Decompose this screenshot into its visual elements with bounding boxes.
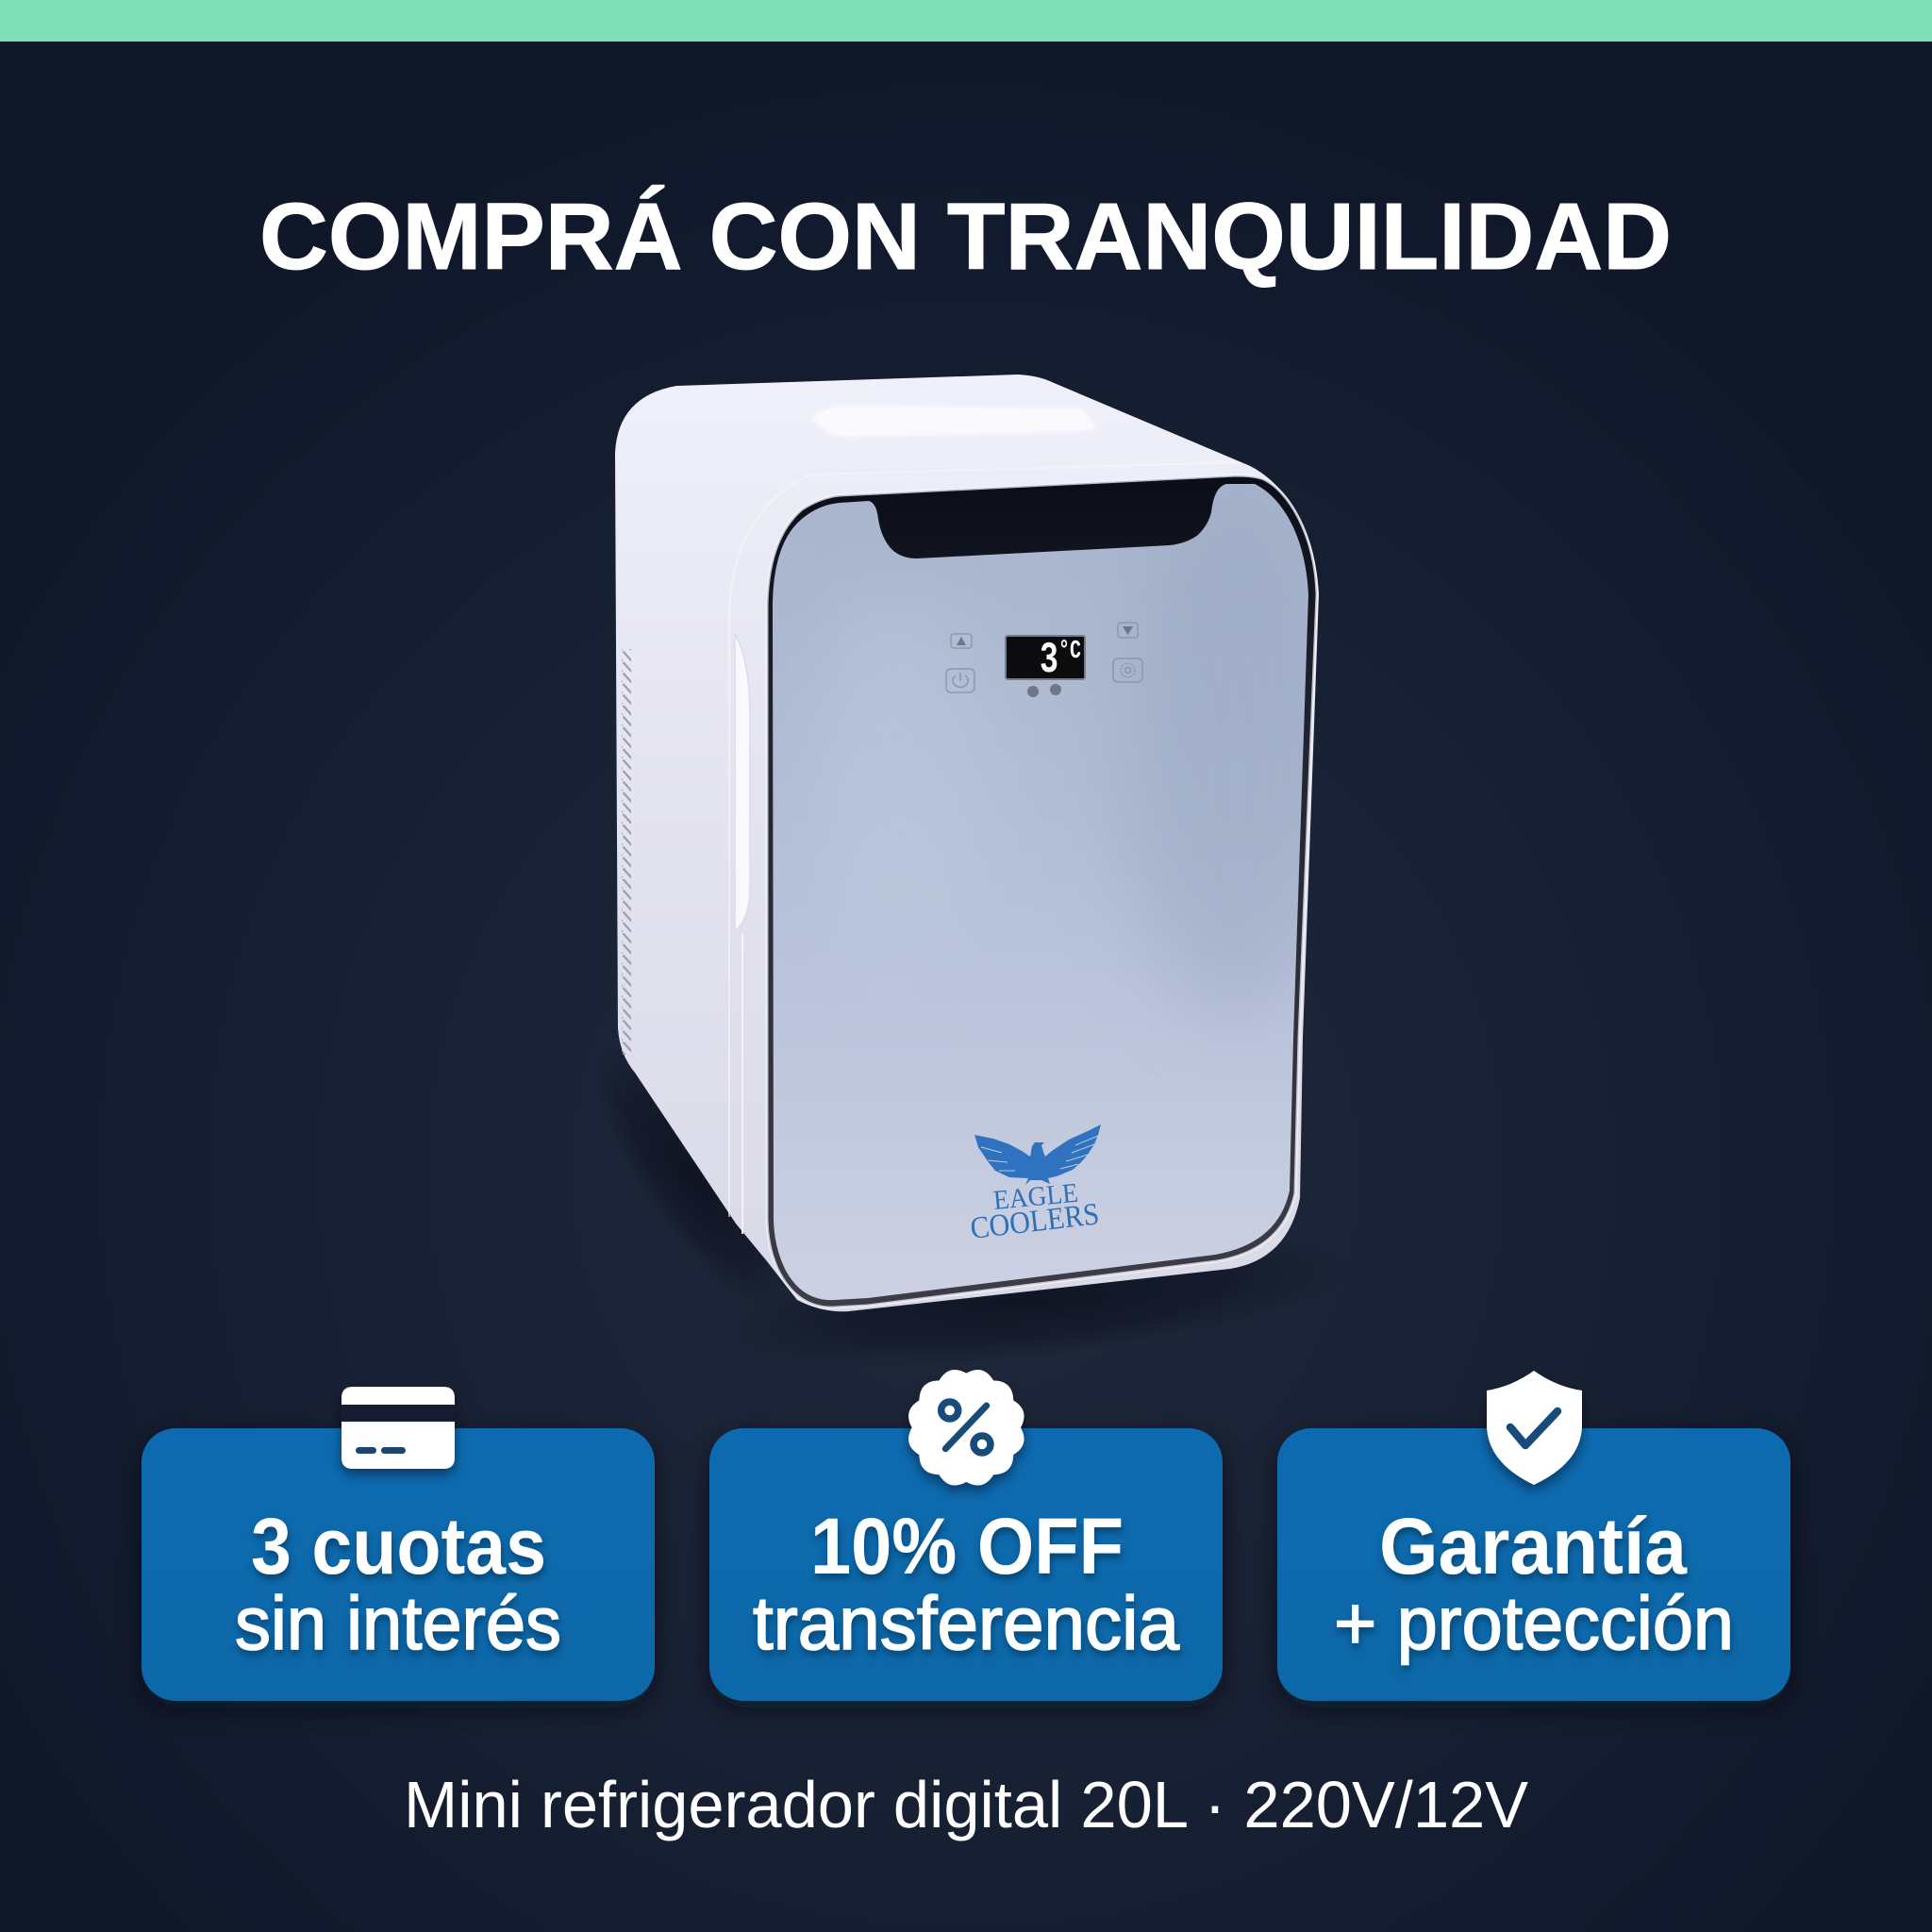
wordmark	[969, 1178, 1101, 1246]
temperature display: °C	[1058, 638, 1081, 666]
card text	[753, 1502, 1179, 1665]
door panel	[773, 484, 1308, 1300]
button down	[1118, 623, 1138, 638]
icon: percent badge	[909, 1371, 1023, 1484]
fridge body	[615, 375, 1319, 1311]
card text: + protección	[1334, 1581, 1734, 1665]
temperature display: 3	[1040, 636, 1058, 685]
button up	[951, 634, 972, 648]
card text: Garantía	[1379, 1502, 1688, 1591]
eagle logo	[969, 1124, 1101, 1246]
card text	[235, 1502, 561, 1665]
icon: credit card	[341, 1387, 455, 1469]
card: 3 cuotas	[142, 1387, 655, 1701]
card text: sin interés	[235, 1581, 561, 1665]
card text	[1334, 1502, 1734, 1665]
top accent band	[0, 0, 1932, 42]
fridge floor shadow	[560, 1017, 1358, 1391]
card: Garantia	[1277, 1371, 1790, 1701]
card background	[1277, 1428, 1790, 1701]
door panel reflection	[1138, 535, 1307, 1008]
footer caption: Mini refrigerador digital 20L · 220V/12V	[404, 1768, 1528, 1841]
card text: transferencia	[753, 1581, 1179, 1665]
wordmark: COOLERS	[969, 1197, 1101, 1246]
side handle	[735, 634, 750, 931]
wordmark: EAGLE	[992, 1178, 1079, 1216]
fridge product image	[560, 375, 1358, 1391]
title: COMPRÁ CON TRANQUILIDAD	[259, 184, 1672, 290]
card background	[142, 1428, 655, 1701]
door edge	[767, 475, 1317, 1307]
inner ridge line	[741, 934, 743, 1234]
card: 10% OFF	[709, 1371, 1223, 1701]
card background	[709, 1428, 1223, 1701]
card text: 3 cuotas	[251, 1502, 546, 1591]
door surround ridge	[729, 462, 1240, 1217]
top handle recess	[811, 406, 1095, 437]
icon: shield check	[1487, 1371, 1582, 1485]
side vents	[622, 649, 631, 1055]
button settings	[1113, 658, 1142, 682]
card text: 10% OFF	[810, 1502, 1124, 1591]
temperature display	[1006, 636, 1085, 685]
indicator lights	[1027, 684, 1061, 697]
eagle mark	[974, 1124, 1101, 1185]
button power	[946, 669, 974, 692]
